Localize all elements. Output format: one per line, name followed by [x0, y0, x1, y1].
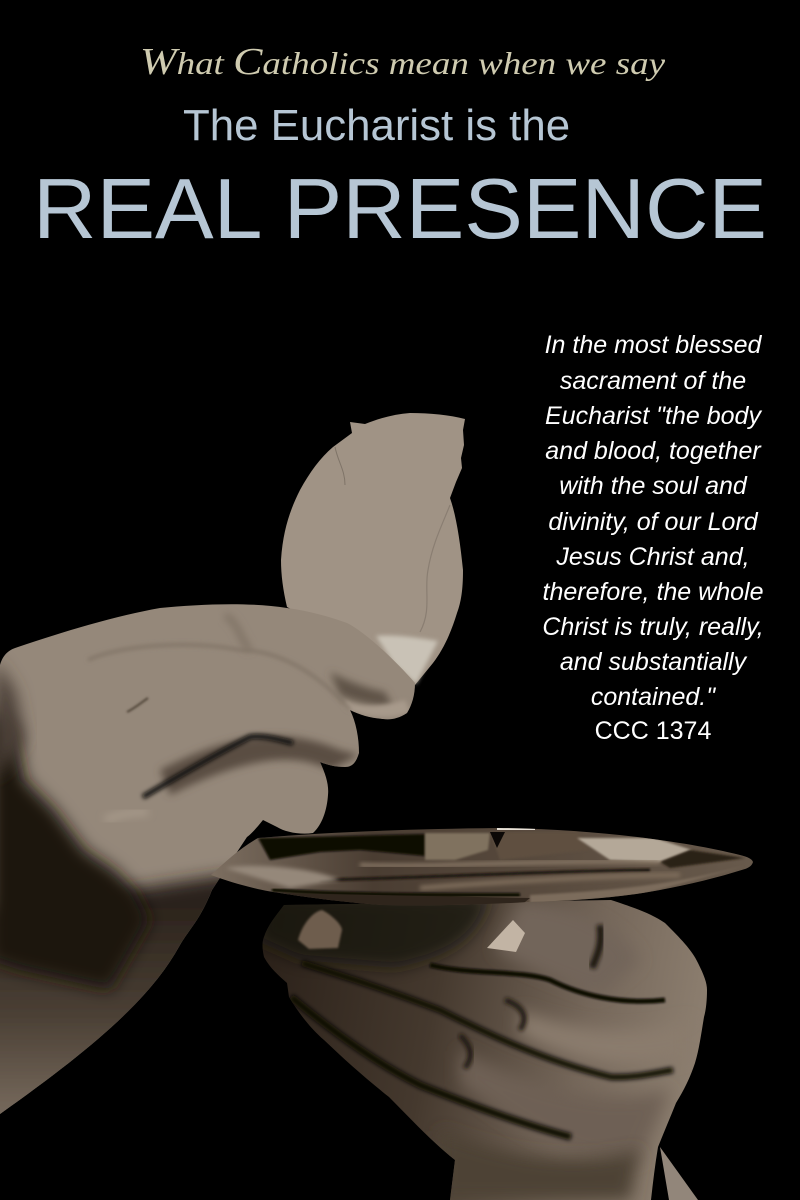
top shadow under paten — [255, 895, 490, 968]
cuff — [660, 1147, 698, 1200]
gap between fingers — [143, 737, 293, 797]
bands — [360, 862, 660, 866]
shade below thumb — [330, 672, 392, 706]
quote text block: divinity, of our Lord — [548, 508, 759, 536]
knuckle wrinkle — [592, 925, 601, 968]
quote text block: CCC 1374 — [595, 717, 711, 745]
lower hand — [250, 895, 720, 1200]
quote text block: with the soul and — [559, 472, 748, 500]
quote text block: and substantially — [560, 648, 748, 676]
knuckle crease — [127, 698, 148, 712]
reflection: right dark — [660, 850, 745, 868]
thumb joint — [225, 615, 250, 650]
index outline — [88, 645, 350, 710]
knuckle shadow — [0, 660, 25, 780]
wrist — [0, 863, 224, 1114]
quote text block: therefore, the whole — [543, 578, 763, 606]
crease between thumb and finger — [430, 965, 665, 1001]
heading: The Eucharist is the: The Eucharist is the — [183, 101, 570, 150]
rim shadow — [272, 890, 520, 895]
reflection: right bright panel — [577, 838, 692, 862]
quote text block: Christ is truly, really, — [542, 613, 764, 641]
photo illustration — [0, 413, 760, 1200]
quote text block: contained." — [591, 683, 716, 711]
quote text block: Jesus Christ and, — [555, 543, 750, 571]
lower crease — [291, 997, 571, 1137]
glints — [497, 828, 535, 830]
icon: eucharistic host — [281, 413, 465, 685]
quote text block: Eucharist "the body — [545, 402, 762, 430]
paten — [212, 828, 753, 906]
title block — [33, 41, 767, 257]
bright fold — [105, 812, 148, 820]
quote text block — [542, 331, 764, 745]
reflection: brown panel — [497, 834, 528, 858]
script heading: What Catholics mean when we say — [140, 41, 666, 83]
nail: left — [298, 910, 342, 949]
palm lights — [514, 1008, 652, 1062]
quote text block: In the most blessed — [545, 331, 762, 359]
upper hand — [0, 604, 415, 1114]
reflection: light panel — [425, 833, 490, 860]
thumb highlight — [496, 902, 578, 974]
crease between fingers — [302, 963, 673, 1077]
shade under fingers — [160, 736, 359, 795]
quote text block: and blood, together — [545, 437, 762, 465]
quote text block: sacrament of the — [560, 367, 746, 395]
nail: right — [487, 920, 525, 952]
dark side of hand — [0, 700, 150, 990]
reflection: dark band — [258, 834, 425, 860]
heading: REAL PRESENCE: REAL PRESENCE — [33, 162, 767, 257]
